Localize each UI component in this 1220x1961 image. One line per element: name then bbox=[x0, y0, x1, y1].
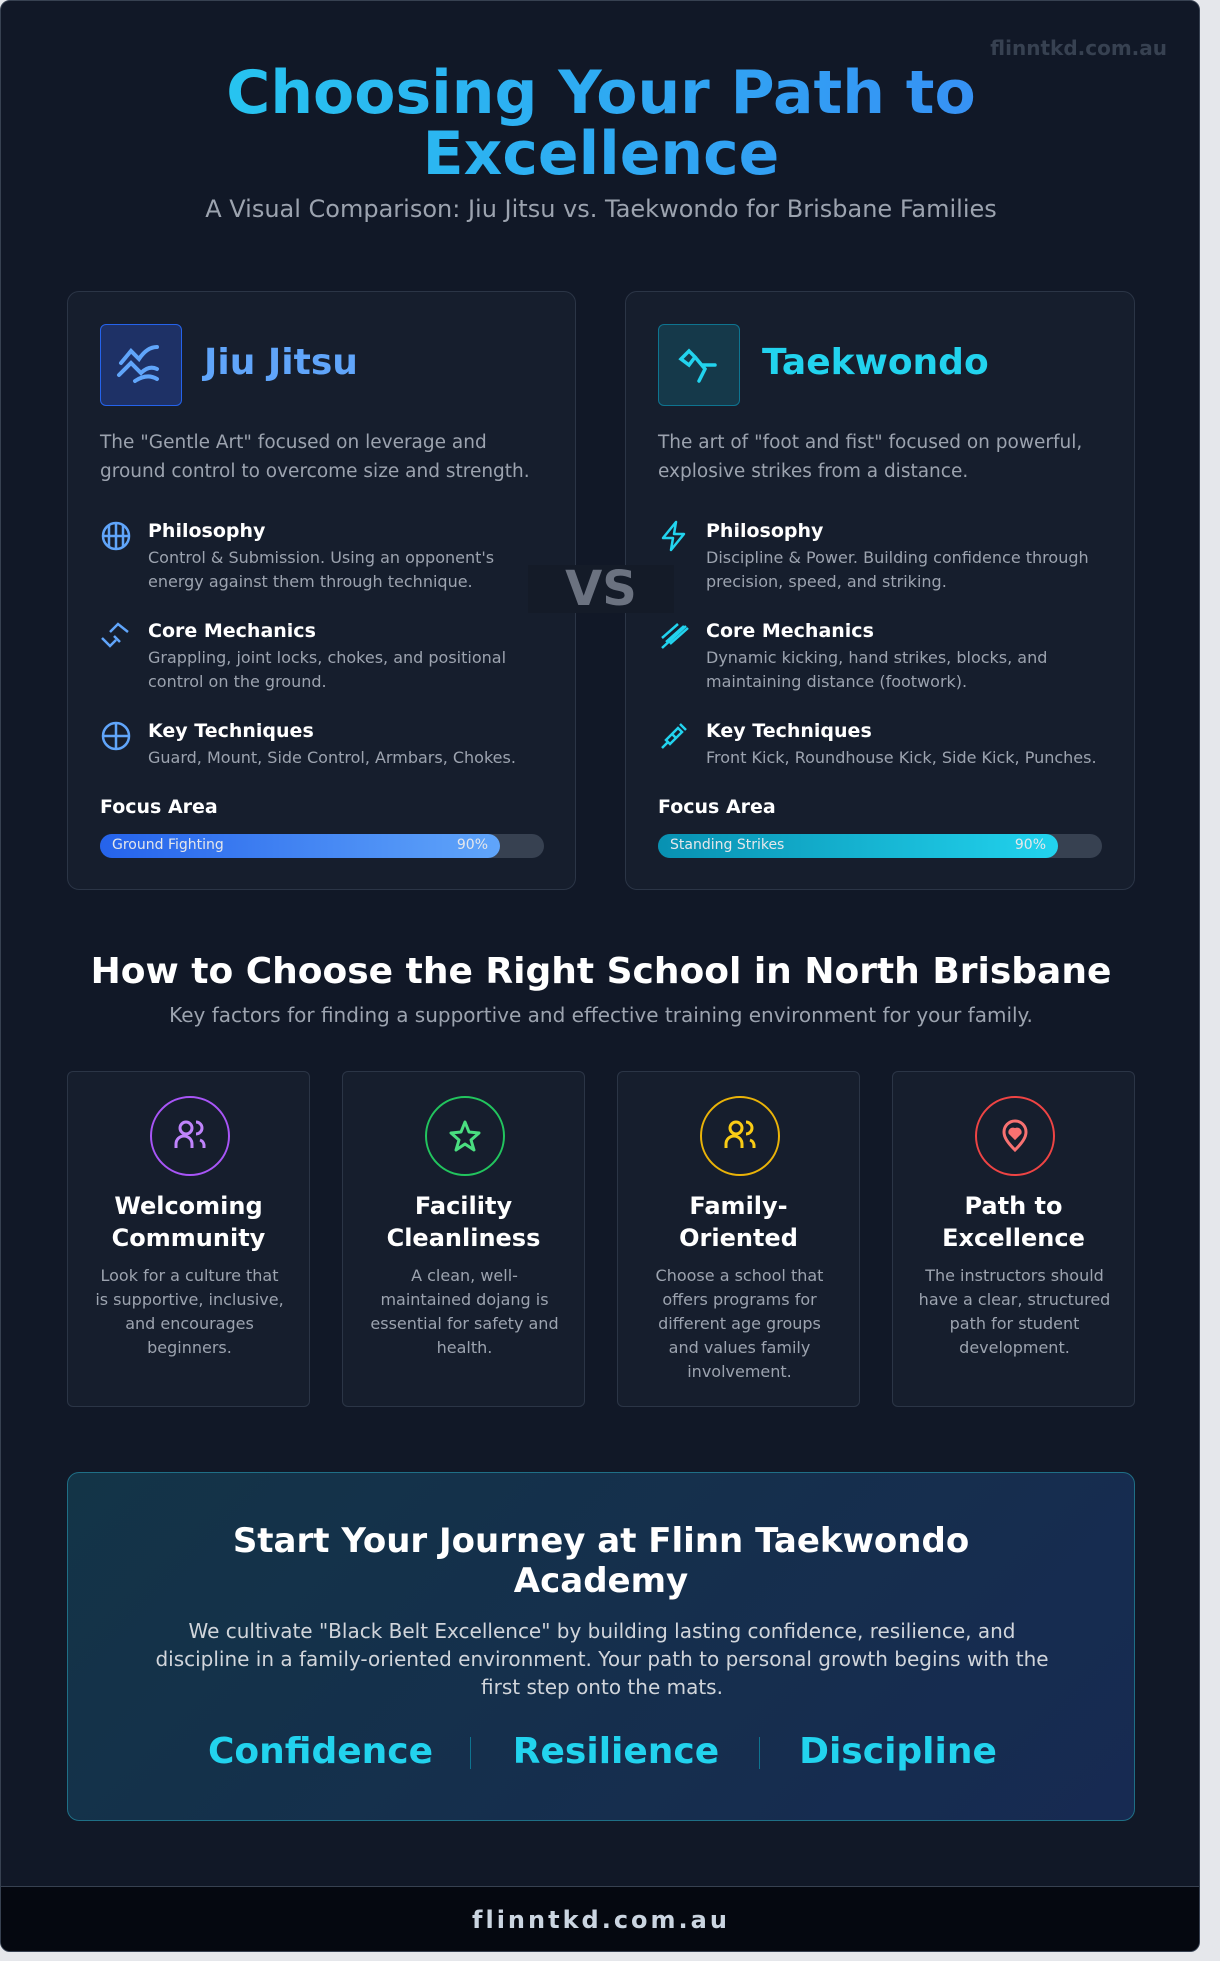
item: philosophy bbox=[102, 520, 494, 591]
bar chart: ground fighting bbox=[100, 834, 544, 858]
vs badge bbox=[528, 565, 674, 613]
panel: taekwondo: Philosophy bbox=[706, 520, 823, 542]
focus label: Focus Area bbox=[100, 796, 218, 818]
panel: facility cleanliness bbox=[342, 1071, 585, 1407]
values row: Confidence bbox=[208, 1731, 433, 1772]
focus label: Focus Area bbox=[658, 796, 776, 818]
icon: people purple bbox=[150, 1096, 230, 1176]
panel: path to excellence: Path to Excellence bbox=[942, 1192, 1085, 1252]
bar chart: standing strikes: 90% bbox=[1015, 837, 1046, 853]
panel: jiu jitsu: Key Techniques bbox=[148, 720, 314, 742]
bar chart: standing strikes bbox=[658, 834, 1102, 858]
icon: taekwondo bbox=[658, 324, 740, 406]
cta heading bbox=[233, 1521, 969, 1601]
panel: taekwondo: Front Kick, Roundhouse Kick, Side Kick, Punches. bbox=[706, 748, 1097, 767]
item: philosophy bbox=[662, 520, 1089, 591]
description: The art of "foot and fist" focused on powerful, explosive strikes from a distance. bbox=[658, 432, 1082, 482]
panel: taekwondo: Discipline & Power. Building confidence through precision, speed, and striking. bbox=[706, 548, 1089, 591]
panel: jiu jitsu: Core Mechanics bbox=[148, 620, 316, 642]
panel: facility cleanliness: A clean, well-maintained dojang is essential for safety and health. bbox=[370, 1266, 559, 1357]
panel: jiu jitsu: Philosophy bbox=[148, 520, 265, 542]
item: key techniques bbox=[102, 720, 516, 767]
icon: pin red bbox=[975, 1096, 1055, 1176]
panel: taekwondo: Key Techniques bbox=[706, 720, 872, 742]
title bbox=[1, 63, 1201, 185]
icon: jiu jitsu bbox=[100, 324, 182, 406]
panel: taekwondo: Core Mechanics bbox=[706, 620, 874, 642]
panel: taekwondo bbox=[625, 291, 1135, 890]
panel: path to excellence: The instructors should have a clear, structured path for student development. bbox=[919, 1266, 1110, 1357]
panel: family oriented: Choose a school that offers programs for different age groups and values family involvement. bbox=[656, 1266, 823, 1381]
bar chart: standing strikes: Standing Strikes bbox=[670, 837, 784, 853]
panel: family oriented bbox=[617, 1071, 860, 1407]
bar chart: ground fighting: Ground Fighting bbox=[112, 837, 224, 853]
item: key techniques bbox=[661, 720, 1097, 767]
panel: taekwondo: Dynamic kicking, hand strikes, blocks, and maintaining distance (footwork). bbox=[706, 648, 1047, 691]
values row: Resilience bbox=[513, 1731, 719, 1772]
bar chart: ground fighting: 90% bbox=[457, 837, 488, 853]
icon: star green bbox=[425, 1096, 505, 1176]
panel: welcoming community: Look for a culture that is supportive, inclusive, and encourages beginners. bbox=[95, 1266, 284, 1357]
cta text: We cultivate "Black Belt Excellence" by building lasting confidence, resilience, and discipline in a family-oriented environment. Your path to personal growth begins with the first step onto the mats. bbox=[155, 1619, 1049, 1699]
panel: welcoming community bbox=[67, 1071, 310, 1407]
values row bbox=[208, 1731, 997, 1772]
heading: jiu jitsu: Jiu Jitsu bbox=[204, 342, 358, 383]
panel: call to action bbox=[67, 1472, 1135, 1821]
cta heading: Academy bbox=[514, 1561, 688, 1601]
item: core mechanics bbox=[101, 620, 506, 691]
panel: facility cleanliness: Facility Cleanliness bbox=[387, 1192, 540, 1252]
footer: flinntkd.com.au bbox=[472, 1906, 730, 1934]
icon: people yellow bbox=[700, 1096, 780, 1176]
values row: Discipline bbox=[799, 1731, 997, 1772]
panel: family oriented: Oriented bbox=[679, 1224, 798, 1252]
panel: path to excellence bbox=[892, 1071, 1135, 1407]
heading: taekwondo: Taekwondo bbox=[762, 342, 989, 383]
footer bbox=[1, 1886, 1201, 1953]
description: The "Gentle Art" focused on leverage and ground control to overcome size and strength. bbox=[100, 432, 530, 482]
vs badge: VS bbox=[565, 561, 637, 617]
section heading: How to Choose the Right School in North Brisbane bbox=[91, 951, 1111, 992]
panel: jiu jitsu: Guard, Mount, Side Control, Armbars, Chokes. bbox=[148, 748, 516, 767]
watermark: flinntkd.com.au bbox=[990, 36, 1167, 60]
item: core mechanics bbox=[661, 620, 1047, 691]
panel: jiu jitsu: Grappling, joint locks, chokes, and positional control on the ground. bbox=[148, 648, 506, 691]
panel: jiu jitsu: Control & Submission. Using an opponent's energy against them through technique. bbox=[148, 548, 494, 591]
cta heading: Start Your Journey at Flinn Taekwondo bbox=[233, 1521, 969, 1561]
panel: family oriented: Family- bbox=[689, 1192, 788, 1220]
section subtitle: Key factors for finding a supportive and effective training environment for your family. bbox=[169, 1003, 1033, 1027]
panel: jiu jitsu bbox=[67, 291, 576, 890]
panel: welcoming community: Welcoming Community bbox=[112, 1192, 265, 1252]
subtitle: A Visual Comparison: Jiu Jitsu vs. Taekwondo for Brisbane Families bbox=[205, 195, 997, 223]
